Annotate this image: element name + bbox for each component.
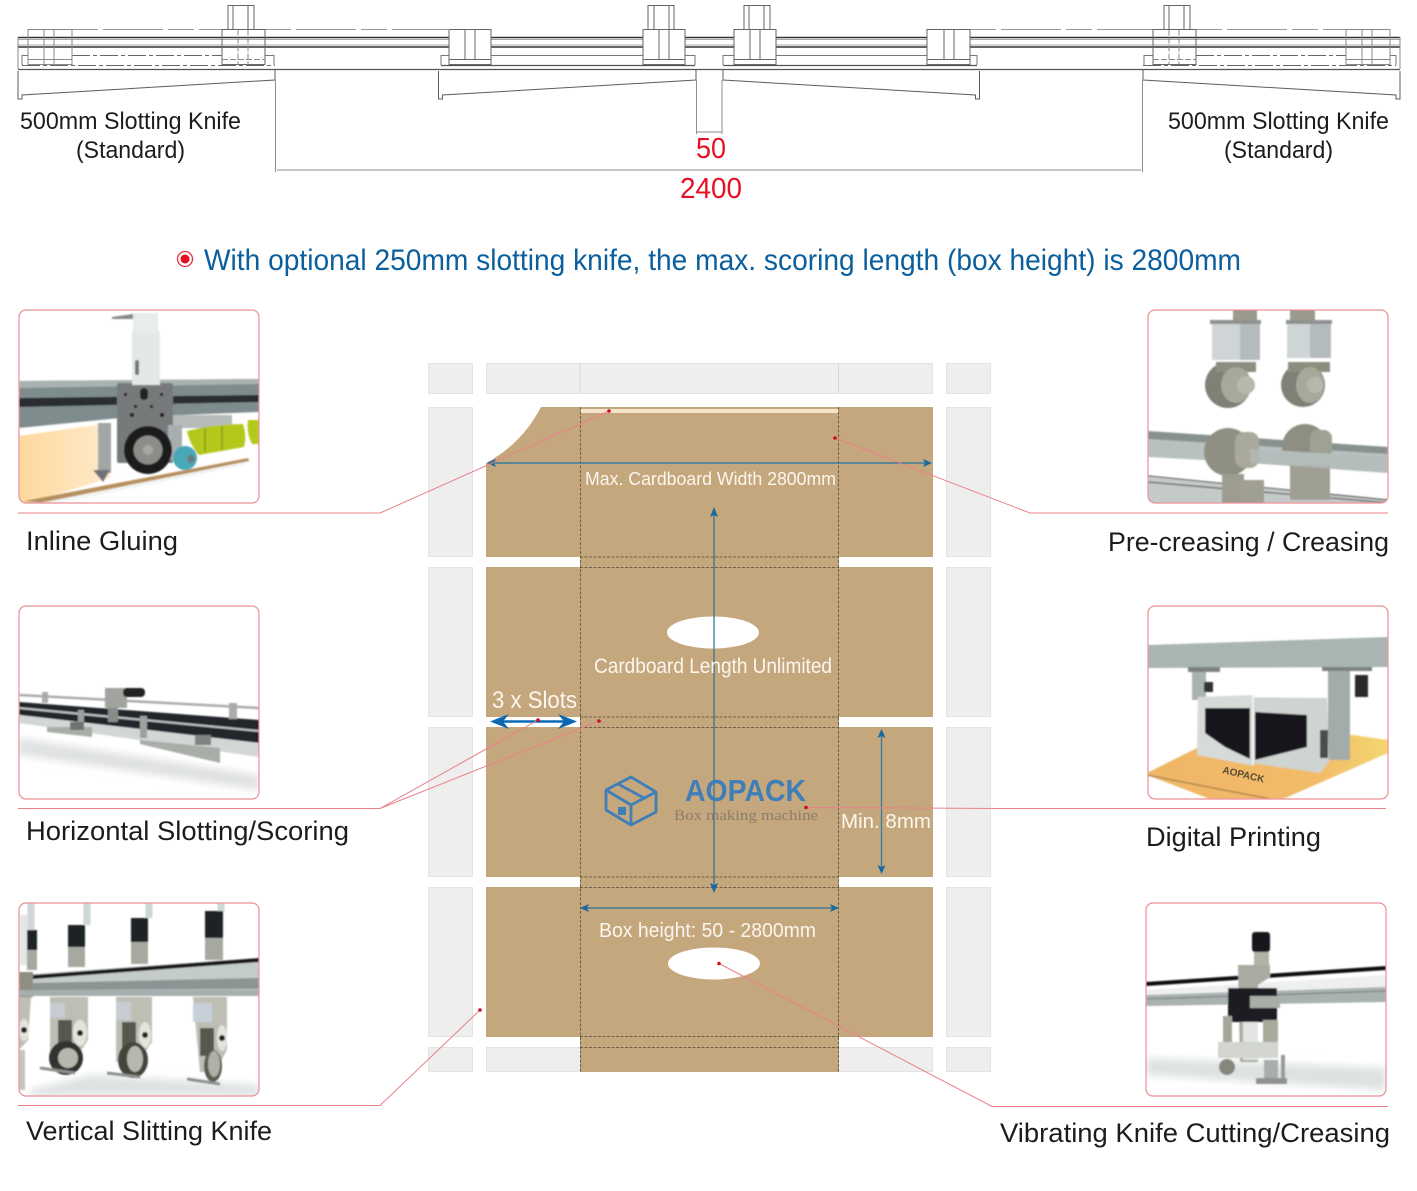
logo <box>606 773 818 825</box>
crease lines <box>580 407 839 1072</box>
light strip <box>581 409 838 413</box>
knife holder blocks <box>28 6 1390 65</box>
grey outer panels <box>428 364 990 1072</box>
arrow: minimum slot distance <box>878 729 886 874</box>
die-cut hand hole upper <box>667 616 759 648</box>
label: vertical slitting: Vertical Slitting Knife <box>26 1116 272 1146</box>
photo: inline gluing <box>19 310 259 503</box>
brand name: AOPACK <box>685 773 807 808</box>
frame <box>19 606 259 799</box>
callout: vibrating knife <box>717 962 1388 1106</box>
kraft cardboard <box>486 407 933 1072</box>
rail lines <box>18 30 1400 70</box>
label: min 8mm: Min. 8mm <box>841 811 931 833</box>
label: cardboard length: Cardboard Length Unlimited <box>594 655 832 678</box>
dimension lines <box>276 80 1142 172</box>
label: box height: Box height: 50 - 2800mm <box>599 920 816 942</box>
label: inline gluing: Inline Gluing <box>26 526 178 556</box>
label: horizontal slotting: Horizontal Slotting/Scoring <box>26 816 349 846</box>
box layout diagram <box>428 364 990 1072</box>
label: vibrating knife: Vibrating Knife Cutting/Creasing <box>1000 1118 1390 1148</box>
frame <box>19 903 259 1096</box>
icon: red bullet <box>178 252 192 266</box>
slotting knife blades <box>18 70 1400 99</box>
left knife label: (Standard) <box>76 137 185 164</box>
dimension 50: 50 <box>696 133 726 165</box>
right knife label <box>1168 108 1389 164</box>
label: digital printing: Digital Printing <box>1146 822 1321 852</box>
callout: horizontal slotting <box>18 718 601 808</box>
photo: pre-creasing and creasing <box>1148 309 1388 504</box>
callout: vertical slitting <box>18 1008 482 1106</box>
printed logo on cardboard: AOPACK <box>1221 765 1266 786</box>
brand tagline: Box making machine <box>674 808 818 824</box>
photo: vertical slitting knife <box>19 903 260 1096</box>
frame <box>1148 310 1388 503</box>
photo: vibrating knife <box>1146 903 1386 1096</box>
arrow: three slots <box>490 714 577 729</box>
left knife label: 500mm Slotting Knife <box>20 108 241 135</box>
arrow: cardboard length <box>710 507 718 893</box>
top technical drawing: knife rail <box>18 6 1400 172</box>
icon: box logo <box>606 777 656 825</box>
dimension 2400: 2400 <box>680 173 742 205</box>
label: 3 x slots: 3 x Slots <box>492 687 577 714</box>
rounded corner cut-out <box>486 407 541 463</box>
frame <box>1148 606 1388 799</box>
note with bullet <box>178 244 1241 277</box>
arrow: cardboard width <box>487 459 932 467</box>
label: max cardboard width: Max. Cardboard Width 2800mm <box>585 469 836 489</box>
right knife label: (Standard) <box>1224 137 1333 164</box>
callout: pre-creasing <box>833 436 1388 513</box>
callout: digital printing <box>804 806 1386 809</box>
callout: inline gluing <box>18 409 611 513</box>
note text: With optional 250mm slotting knife, the max. scoring length (box height) is 2800mm <box>204 244 1241 277</box>
left knife label <box>20 108 241 164</box>
photo: digital printing <box>1147 606 1388 799</box>
photo: horizontal slotting <box>19 606 259 799</box>
label: pre-creasing: Pre-creasing / Creasing <box>1108 527 1389 557</box>
arrow: box height <box>580 904 839 912</box>
die-cut hand hole lower <box>668 948 760 980</box>
frame <box>1146 903 1386 1096</box>
right knife label: 500mm Slotting Knife <box>1168 108 1389 135</box>
frame <box>19 310 259 503</box>
